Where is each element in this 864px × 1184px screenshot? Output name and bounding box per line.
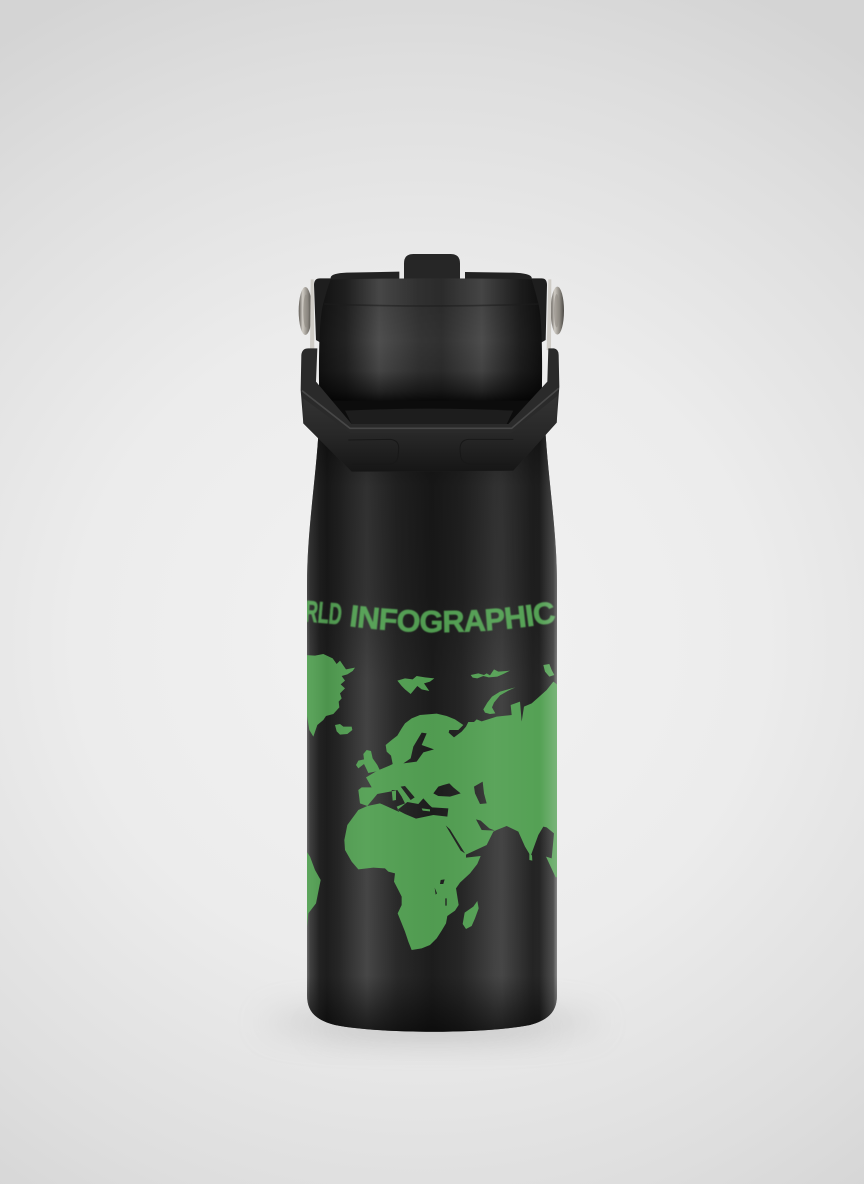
neck below lid (330, 401, 533, 427)
map: Sri Lanka (529, 853, 532, 861)
map: Severnaya Zemlya (543, 664, 554, 677)
map: Greenland (303, 654, 355, 737)
map: Franz Josef Land (471, 669, 510, 678)
map: Iceland (335, 724, 352, 735)
bottle surface sheen (307, 425, 557, 1030)
spout tab (404, 254, 460, 283)
handle right grip inset (460, 439, 513, 464)
bottle title text (307, 600, 556, 634)
map: Madagascar (463, 901, 479, 929)
handle bracket arms (314, 278, 547, 350)
icon: metal pivot screw left (299, 279, 314, 351)
bottle title text: WORLD (273, 593, 343, 632)
map: South America (307, 852, 321, 926)
bottle body (300, 425, 564, 1037)
world map (303, 654, 560, 950)
map: Svalbard (397, 676, 434, 694)
lid cup (319, 278, 542, 403)
handle band (301, 348, 559, 472)
lid and handle assembly (299, 254, 564, 472)
handle left grip inset (348, 439, 399, 464)
lid rim (331, 272, 532, 283)
map: Eurasia and Africa (344, 682, 560, 950)
bottle title text: INFOGRAPHIC (350, 601, 556, 634)
map: Great Britain and Ireland (356, 750, 380, 773)
floor shadow (262, 1006, 602, 1038)
printed artwork clipped to the bottle (307, 600, 557, 950)
map: Novaya Zemlya (483, 687, 515, 714)
icon: metal pivot screw right (547, 279, 564, 351)
